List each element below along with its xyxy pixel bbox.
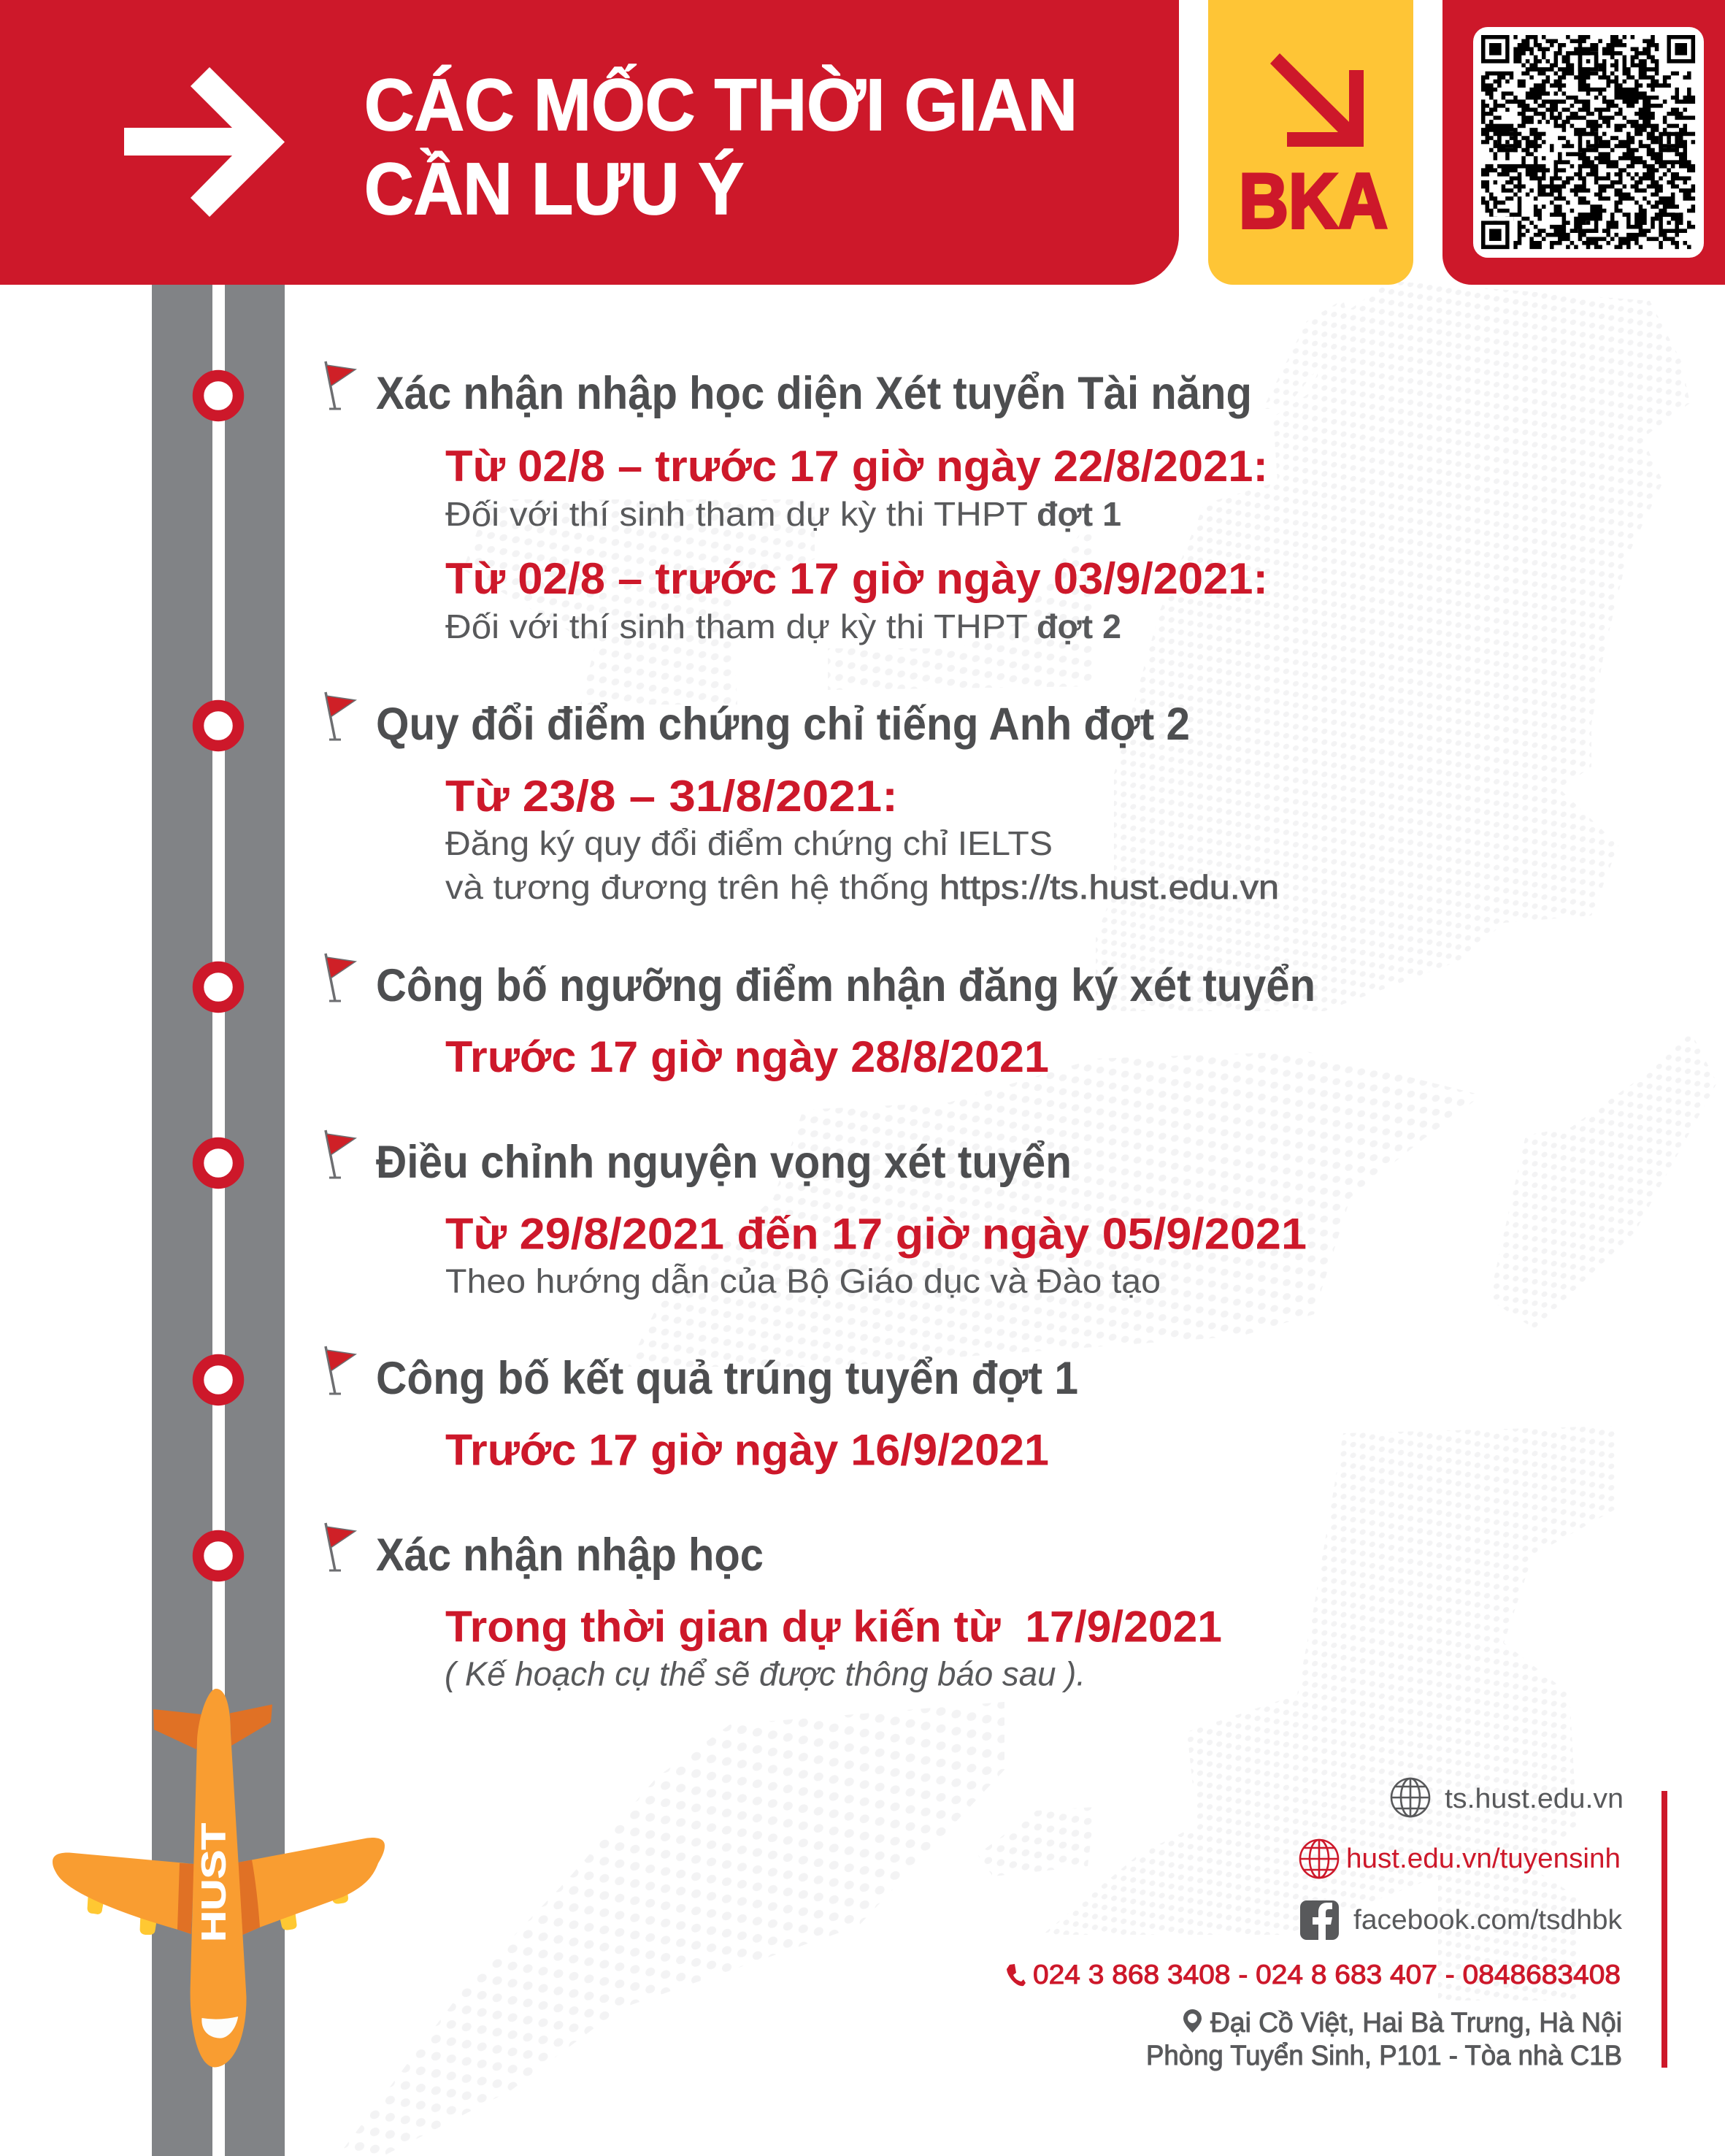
fuselage xyxy=(191,1689,247,2068)
note: Theo hướng dẫn của Bộ Giáo dục và Đào tạo xyxy=(445,1262,1161,1300)
expected date: Trong thời gian dự kiến từ 17/9/2021 xyxy=(445,1602,1222,1651)
icon: grey globe xyxy=(1391,1779,1429,1817)
icon: facebook xyxy=(1300,1900,1339,1940)
icon: right arrow xyxy=(124,67,285,217)
tail wings xyxy=(153,1704,272,1749)
flag xyxy=(326,361,356,409)
HUST label: HUST xyxy=(195,1823,233,1942)
heading: Xác nhận nhập học xyxy=(376,1530,764,1581)
address line 2: Phòng Tuyển Sinh, P101 - Tòa nhà C1B xyxy=(1146,2041,1622,2071)
phone numbers: 024 3 868 3408 - 024 8 683 407 - 0848683408 xyxy=(1033,1960,1621,1990)
note line 1: Đăng ký quy đổi điểm chứng chỉ IELTS xyxy=(445,824,1053,862)
milestone 6: enrolment confirmation xyxy=(326,1523,1222,1692)
facebook link: facebook.com/tsdhbk xyxy=(1353,1905,1623,1936)
contact block xyxy=(1007,1779,1667,2071)
icon: airplane xyxy=(53,1689,385,2068)
date range: Từ 29/8/2021 đến 17 giờ ngày 05/9/2021 xyxy=(445,1209,1307,1259)
note 2: đợt 2 xyxy=(1037,607,1121,645)
heading: Điều chỉnh nguyện vọng xét tuyển xyxy=(376,1137,1072,1188)
title: CÁC MỐC THỜI GIAN xyxy=(364,64,1077,146)
italic note: ( Kế hoạch cụ thể sẽ được thông báo sau ). xyxy=(445,1654,1086,1692)
title xyxy=(364,64,1077,230)
note line 2: https://ts.hust.edu.vn xyxy=(940,868,1279,906)
flag xyxy=(326,1130,356,1178)
dotted world map background xyxy=(338,281,1717,2156)
date range 1: Từ 02/8 – trước 17 giờ ngày 22/8/2021: xyxy=(445,442,1268,491)
note line 2 xyxy=(445,868,1279,906)
date range: Từ 23/8 – 31/8/2021: xyxy=(445,772,898,821)
engines xyxy=(88,1884,348,1935)
heading: Công bố ngưỡng điểm nhận đăng ký xét tuyển xyxy=(376,960,1315,1011)
wings xyxy=(53,1852,194,1934)
runway xyxy=(152,285,285,2156)
deadline: Trước 17 giờ ngày 16/9/2021 xyxy=(445,1425,1049,1475)
BKA logo tab xyxy=(1208,0,1413,285)
icon: map pin xyxy=(1183,2009,1202,2033)
milestone 4: adjust preferences xyxy=(326,1130,1307,1300)
note 1: Đối với thí sinh tham dự kỳ thi THPT xyxy=(445,495,1028,533)
flag xyxy=(326,692,356,740)
heading: Quy đổi điểm chứng chỉ tiếng Anh đợt 2 xyxy=(376,699,1190,750)
milestone 5: first round results xyxy=(326,1346,1078,1475)
icon: phone xyxy=(1007,1964,1026,1986)
deadline: Trước 17 giờ ngày 28/8/2021 xyxy=(445,1032,1049,1081)
icon: diagonal arrow xyxy=(1270,53,1364,147)
QR code panel xyxy=(1442,0,1725,285)
flag xyxy=(326,1346,356,1394)
heading: Công bố kết quả trúng tuyển đợt 1 xyxy=(376,1353,1078,1404)
icon: red globe xyxy=(1300,1840,1338,1878)
flag xyxy=(326,954,356,1001)
milestone 2: English certificate conversion xyxy=(326,692,1279,906)
header banner xyxy=(0,0,1179,285)
heading: Xác nhận nhập học diện Xét tuyển Tài năng xyxy=(376,368,1252,419)
milestone 3: score threshold announcement xyxy=(326,954,1315,1081)
website link: ts.hust.edu.vn xyxy=(1445,1784,1624,1814)
admissions link: hust.edu.vn/tuyensinh xyxy=(1346,1844,1621,1874)
BKA wordmark: BKA xyxy=(1239,157,1388,245)
QR code xyxy=(1481,35,1695,249)
note line 2: và tương đương trên hệ thống xyxy=(445,868,929,906)
milestone 1: talent admission confirmation xyxy=(326,361,1268,645)
milestone markers on runway xyxy=(199,375,238,1576)
flag xyxy=(326,1523,356,1570)
red accent bar xyxy=(1661,1791,1667,2068)
windshield xyxy=(201,2017,238,2038)
note 1: đợt 1 xyxy=(1037,495,1121,533)
title: CẦN LƯU Ý xyxy=(364,148,744,230)
address line 1: Đại Cồ Việt, Hai Bà Trưng, Hà Nội xyxy=(1210,2008,1622,2038)
note 2: Đối với thí sinh tham dự kỳ thi THPT xyxy=(445,607,1028,645)
date range 2: Từ 02/8 – trước 17 giờ ngày 03/9/2021: xyxy=(445,554,1268,603)
